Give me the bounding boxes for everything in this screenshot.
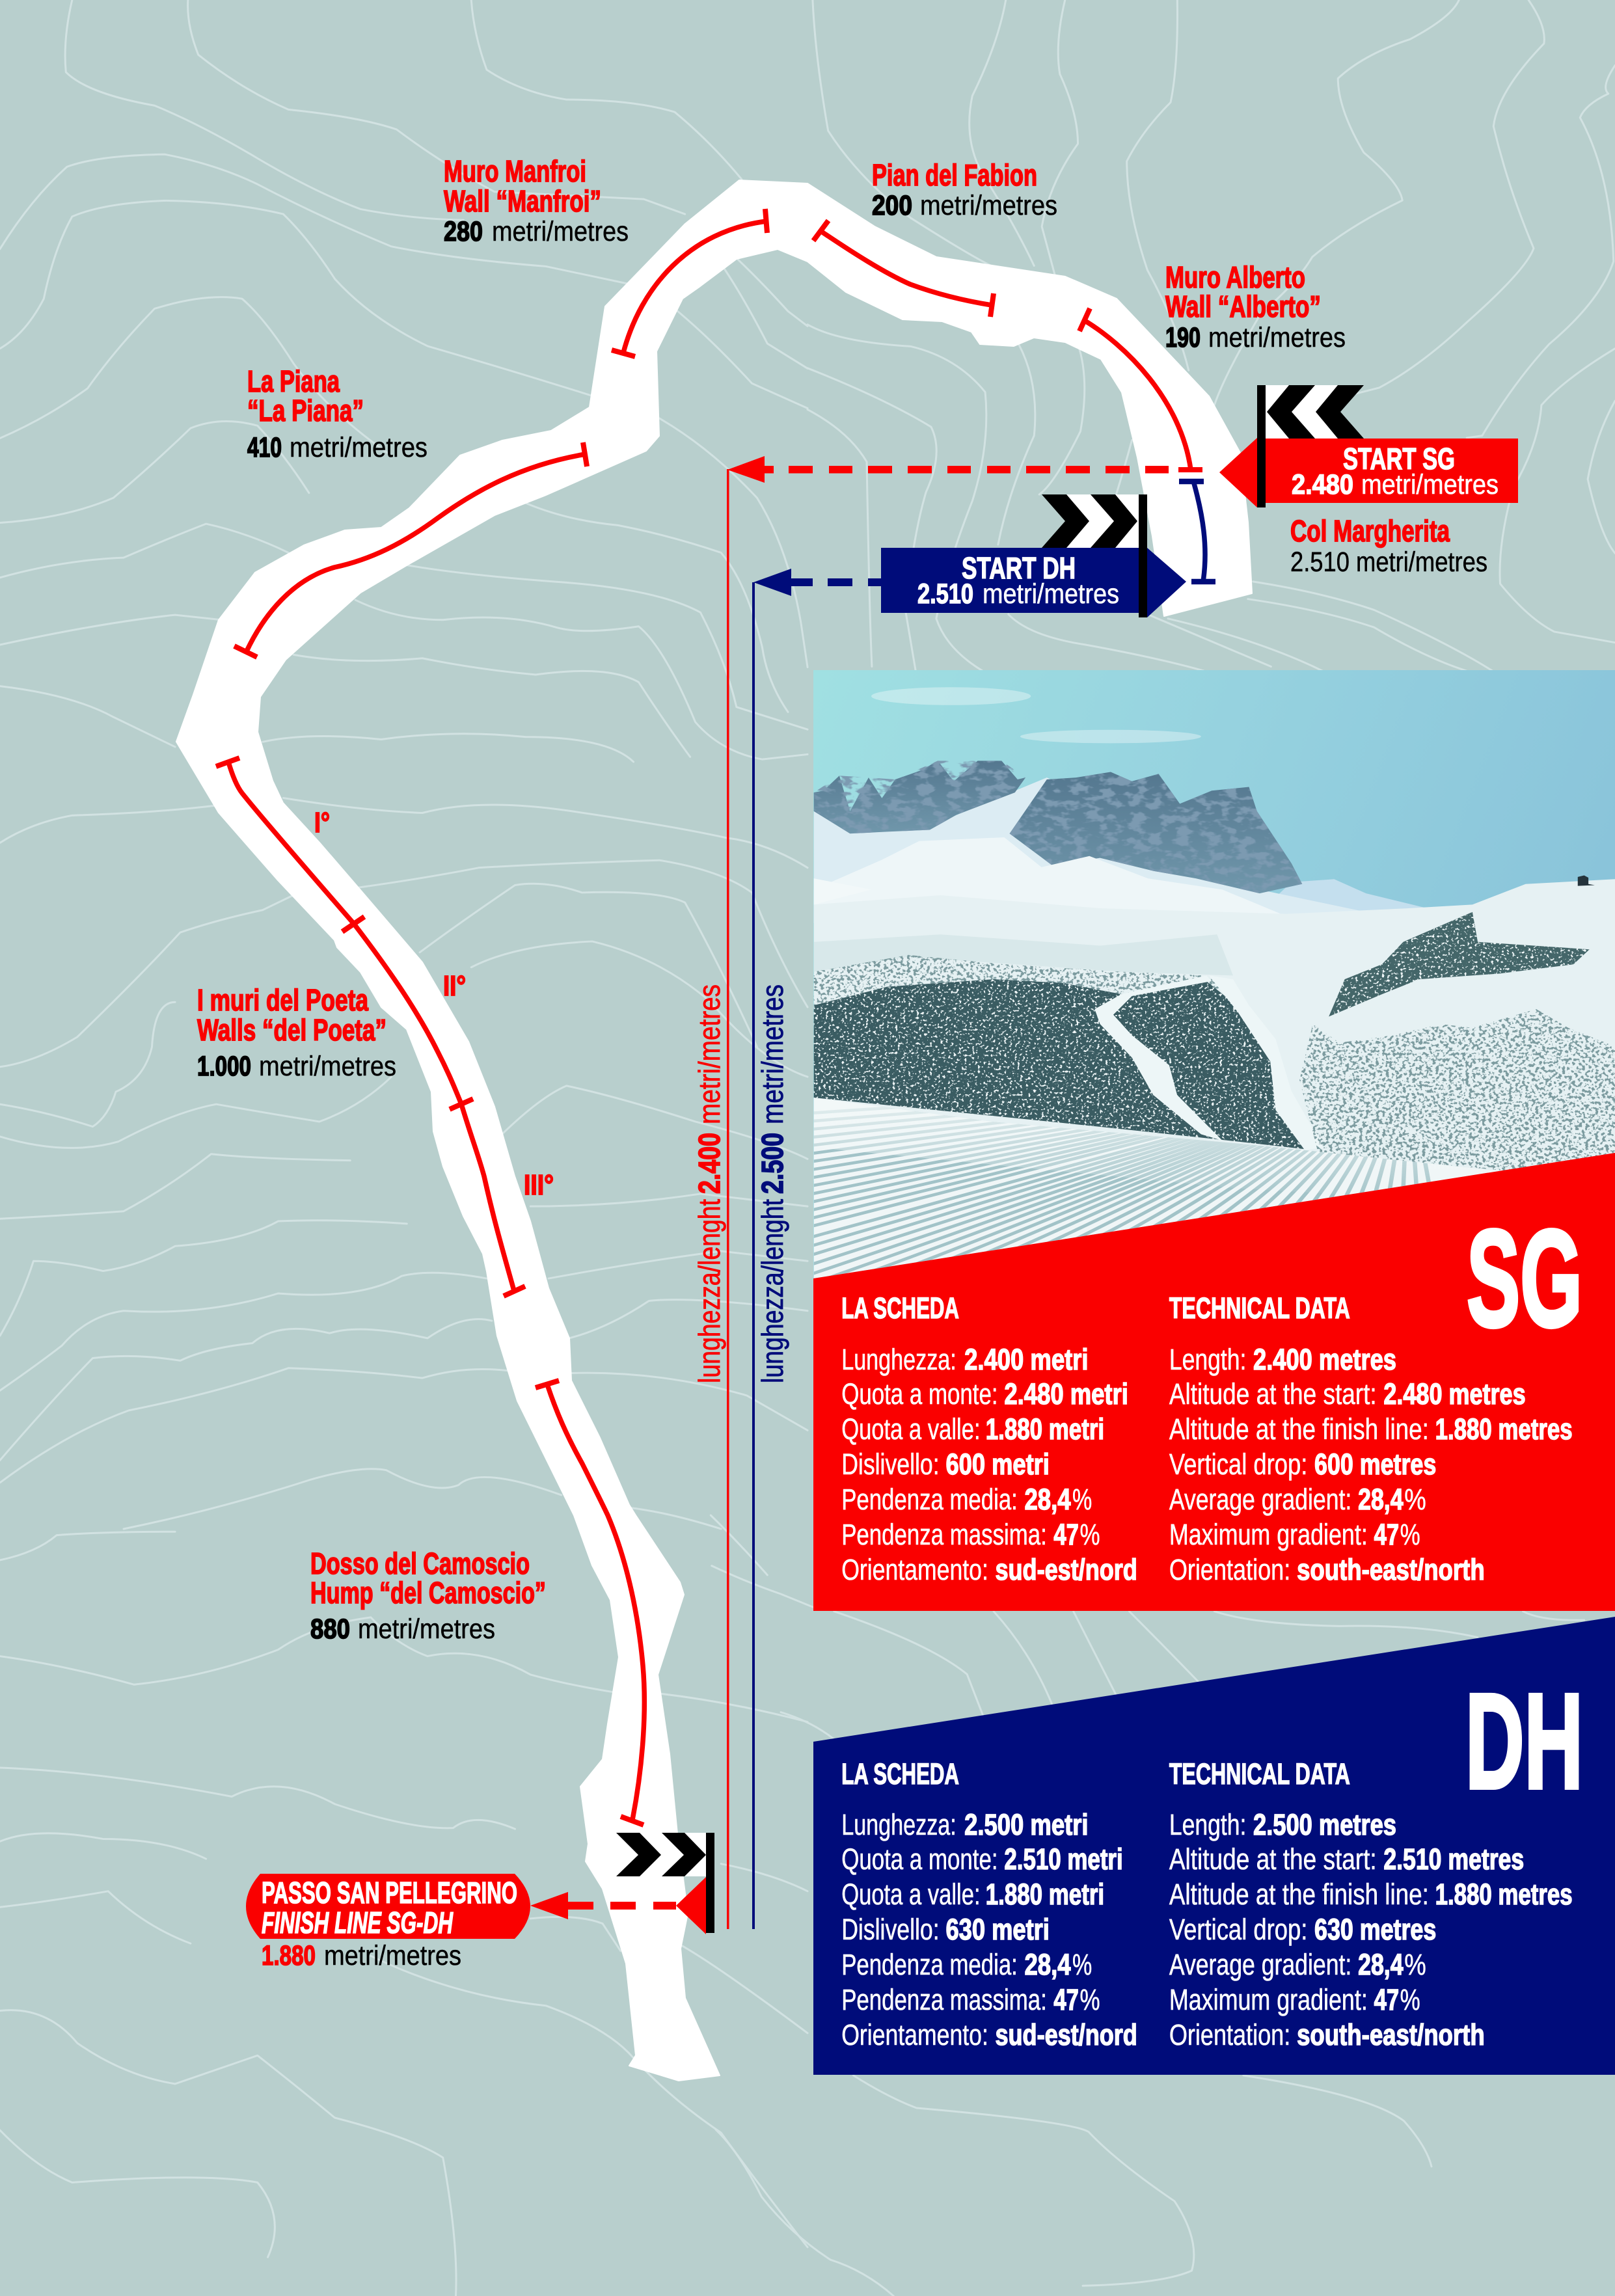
ski run B: [1094, 975, 1223, 1141]
DH data rows: 28,4: [1358, 1948, 1404, 1981]
finish label pill: [246, 1874, 530, 1939]
flag: START DH: [881, 494, 1186, 617]
label: Muro Manfroi: [444, 154, 629, 247]
dashed arrow: SG start to length line: [727, 456, 1169, 483]
SG data rows: Orientamento:: [841, 1553, 988, 1586]
DH data rows: Lunghezza:: [841, 1808, 957, 1841]
hut on ridge: [1578, 876, 1595, 886]
length line: DH: [752, 582, 755, 1929]
vertical label: DH length: lunghezza/lenght: [755, 1199, 789, 1383]
segment: Col Margherita (downhill): [1179, 481, 1215, 582]
finish altitude: 1.880: [262, 1940, 316, 1971]
DH data rows: Maximum gradient:: [1169, 1983, 1368, 2016]
clouds: [871, 687, 1201, 743]
SG data rows: %: [1400, 1518, 1420, 1551]
flag: START SG: 2.480: [1292, 469, 1353, 500]
DH data rows: 1.880 metres: [1435, 1878, 1573, 1911]
SG data rows: Altitude at the finish line:: [1169, 1412, 1429, 1446]
label: Muro Alberto: [1165, 260, 1346, 353]
label: Col Margherita: 2.510 metri/metres: [1290, 547, 1487, 578]
groomed snow foreground: [813, 1098, 1500, 1278]
rock group left: [814, 761, 1025, 833]
DH data rows: Quota a valle:: [841, 1878, 981, 1911]
DH data rows: south-east/north: [1297, 2018, 1485, 2051]
DH data rows: 28,4: [1024, 1948, 1071, 1981]
label: La Piana: [247, 364, 428, 463]
DH data rows: 1.880 metri: [986, 1878, 1104, 1911]
label: Muro Alberto: Wall “Alberto”: [1165, 290, 1321, 323]
snow fade along crest: [814, 1098, 1494, 1204]
label: Muro Alberto: 190: [1165, 322, 1201, 353]
flag: START SG: [1219, 385, 1518, 507]
SG data rows: Quota a monte:: [841, 1377, 998, 1411]
DH data rows: TECHNICAL DATA: [1169, 1757, 1350, 1790]
vertical label: SG length: 2.400: [692, 1133, 726, 1194]
DH data rows: %: [1079, 1983, 1100, 2016]
SG data rows: %: [1072, 1483, 1092, 1516]
label: La Piana: 410: [247, 432, 282, 463]
forest right sparse: [1299, 1009, 1615, 1172]
flag: START DH: metri/metres: [983, 578, 1119, 610]
panel: DH technical data: [813, 1617, 1615, 2075]
SG data rows: 2.400 metri: [964, 1343, 1089, 1376]
flag: START DH: 2.510: [917, 578, 973, 610]
label: I muri del Poeta: I muri del Poeta: [197, 983, 368, 1017]
DH data rows: Altitude at the start:: [1169, 1843, 1377, 1876]
DH data rows: Vertical drop:: [1169, 1913, 1307, 1946]
SG data rows: 600 metres: [1314, 1448, 1436, 1481]
segment: La Piana: [234, 442, 587, 657]
segment: Muro Alberto: [1079, 308, 1202, 470]
SG data rows: 28,4: [1358, 1483, 1404, 1516]
DH data rows: 47: [1053, 1983, 1079, 2016]
DH data rows: Altitude at the finish line:: [1169, 1878, 1429, 1911]
label: wall number I: I°: [314, 807, 330, 839]
photo: snowy mountain landscape: [813, 670, 1615, 1278]
label: Muro Manfroi: metri/metres: [492, 216, 629, 247]
label: I muri del Poeta: [197, 983, 396, 1082]
DH data rows: 2.510 metri: [1004, 1843, 1123, 1876]
SG data rows: Length:: [1169, 1343, 1246, 1376]
dashed arrow: DH start to length line: [753, 569, 882, 596]
segment: I muri del Poeta: [216, 758, 525, 1296]
DH data rows: %: [1400, 1983, 1420, 2016]
label: La Piana: “La Piana”: [247, 394, 364, 427]
label: Muro Alberto: metri/metres: [1208, 322, 1346, 353]
label: wall number II: II°: [443, 970, 466, 1002]
SG data rows: Dislivello:: [841, 1448, 940, 1481]
label: Muro Manfroi: Wall “Manfroi”: [444, 184, 601, 218]
finish label pill: FINISH LINE SG-DH: [262, 1906, 454, 1939]
SG data rows: Vertical drop:: [1169, 1448, 1307, 1481]
label: Dosso del Camoscio: 880: [310, 1614, 350, 1645]
label: Muro Manfroi: 280: [444, 216, 483, 247]
dashed arrow: finish to label: [530, 1892, 676, 1919]
SG data rows: LA SCHEDA: [841, 1291, 959, 1325]
SG data rows: sud-est/nord: [995, 1553, 1137, 1586]
label: I muri del Poeta: Walls “del Poeta”: [197, 1013, 387, 1047]
DH data rows: LA SCHEDA: [841, 1757, 959, 1790]
SG data rows: 2.480 metres: [1383, 1377, 1526, 1411]
segment: Pian del Fabion: [813, 221, 994, 317]
vertical label: DH length: 2.500: [755, 1133, 789, 1194]
DH data rows: Dislivello:: [841, 1913, 940, 1946]
label: Dosso del Camoscio: metri/metres: [358, 1614, 495, 1645]
label: Dosso del Camoscio: Hump “del Camoscio”: [310, 1576, 546, 1610]
DH data rows: [841, 1757, 1573, 2051]
dense forest left: [814, 979, 1305, 1149]
SG data rows: %: [1079, 1518, 1100, 1551]
SG data rows: 47: [1374, 1518, 1399, 1551]
snow base behind rocks: [813, 777, 1359, 914]
label: Dosso del Camoscio: [310, 1546, 546, 1645]
label: Pian del Fabion: metri/metres: [920, 190, 1057, 221]
flag: START SG: START SG: [1343, 442, 1455, 476]
vertical label: SG length: lunghezza/lenght: [692, 1199, 726, 1383]
label: Pian del Fabion: [872, 158, 1057, 221]
segment: Muro Manfroi: [612, 209, 767, 357]
vertical label: DH length: metri/metres: [755, 984, 789, 1124]
label: La Piana: La Piana: [247, 364, 340, 398]
DH data rows: Orientamento:: [841, 2018, 988, 2051]
finish altitude: [262, 1940, 461, 1971]
DH data rows: 47: [1374, 1983, 1399, 2016]
DH data rows: Average gradient:: [1169, 1948, 1351, 1981]
SG data rows: %: [1404, 1483, 1426, 1516]
label: Col Margherita: Col Margherita: [1290, 514, 1450, 548]
sparse forest band: [814, 955, 1223, 1024]
label: Pian del Fabion: 200: [872, 190, 912, 221]
SG data rows: TECHNICAL DATA: [1169, 1291, 1350, 1325]
SG data rows: Quota a valle:: [841, 1412, 981, 1446]
SG data rows: south-east/north: [1297, 1553, 1485, 1586]
SG data rows: Pendenza media:: [841, 1483, 1018, 1516]
SG data rows: 1.880 metri: [986, 1412, 1104, 1446]
SG data rows: Altitude at the start:: [1169, 1377, 1377, 1411]
label: I muri del Poeta: 1.000: [197, 1051, 251, 1082]
DH data rows: Length:: [1169, 1808, 1246, 1841]
vertical label: DH length: [755, 984, 789, 1383]
ski slope track: [176, 180, 1252, 2081]
DH data rows: 2.500 metres: [1253, 1808, 1396, 1841]
finish altitude: metri/metres: [324, 1940, 461, 1971]
DH data rows: %: [1404, 1948, 1426, 1981]
label: wall number III: III°: [524, 1169, 554, 1201]
finish flag: [616, 1833, 714, 1934]
dark trees ridge: [1329, 912, 1590, 1017]
DH data rows: Pendenza media:: [841, 1948, 1018, 1981]
SG data rows: Pendenza massima:: [841, 1518, 1047, 1551]
vertical label: SG length: [692, 984, 726, 1383]
snow mound front of massif: [814, 837, 1281, 923]
flag: START SG: metri/metres: [1361, 469, 1499, 500]
vertical label: SG length: metri/metres: [692, 984, 726, 1124]
segment: Dosso del Camoscio: [536, 1381, 644, 1825]
DH data rows: Quota a monte:: [841, 1843, 998, 1876]
SG data rows: Average gradient:: [1169, 1483, 1351, 1516]
DH data rows: 630 metres: [1314, 1913, 1436, 1946]
DH data rows: 2.500 metri: [964, 1808, 1089, 1841]
shaded snow bands: [814, 934, 1233, 975]
panel: SG technical data: [813, 1153, 1615, 1611]
finish label pill: PASSO SAN PELLEGRINO: [262, 1876, 517, 1910]
flag: START DH: START DH: [962, 551, 1076, 585]
SG data rows: 2.480 metri: [1004, 1377, 1128, 1411]
label: Muro Alberto: Muro Alberto: [1165, 260, 1305, 294]
SG data rows: Maximum gradient:: [1169, 1518, 1368, 1551]
distant ridge: [1279, 879, 1424, 911]
DH data rows: 630 metri: [945, 1913, 1050, 1946]
label: Pian del Fabion: Pian del Fabion: [872, 158, 1037, 192]
ski run A: [1212, 979, 1305, 1149]
DH data rows: sud-est/nord: [995, 2018, 1137, 2051]
SG data rows: 1.880 metres: [1435, 1412, 1573, 1446]
label: Dosso del Camoscio: Dosso del Camoscio: [310, 1546, 530, 1580]
label: I muri del Poeta: metri/metres: [259, 1051, 396, 1082]
SG data rows: 28,4: [1024, 1483, 1071, 1516]
DH data rows: %: [1072, 1948, 1092, 1981]
DH data rows: Orientation:: [1169, 2018, 1290, 2051]
label: La Piana: metri/metres: [290, 432, 428, 463]
DH data rows: 2.510 metres: [1383, 1843, 1524, 1876]
length line: SG: [727, 469, 729, 1929]
rock massif: [1010, 772, 1302, 893]
SG data rows: Lunghezza:: [841, 1343, 957, 1376]
SG data rows: 600 metri: [945, 1448, 1050, 1481]
snowfield: [814, 879, 1615, 1181]
label: Muro Manfroi: Muro Manfroi: [444, 154, 586, 188]
label: Col Margherita: [1290, 514, 1487, 578]
SG data rows: [841, 1291, 1573, 1586]
SG data rows: 47: [1053, 1518, 1079, 1551]
DH data rows: Pendenza massima:: [841, 1983, 1047, 2016]
SG data rows: 2.400 metres: [1253, 1343, 1396, 1376]
SG data rows: Orientation:: [1169, 1553, 1290, 1586]
